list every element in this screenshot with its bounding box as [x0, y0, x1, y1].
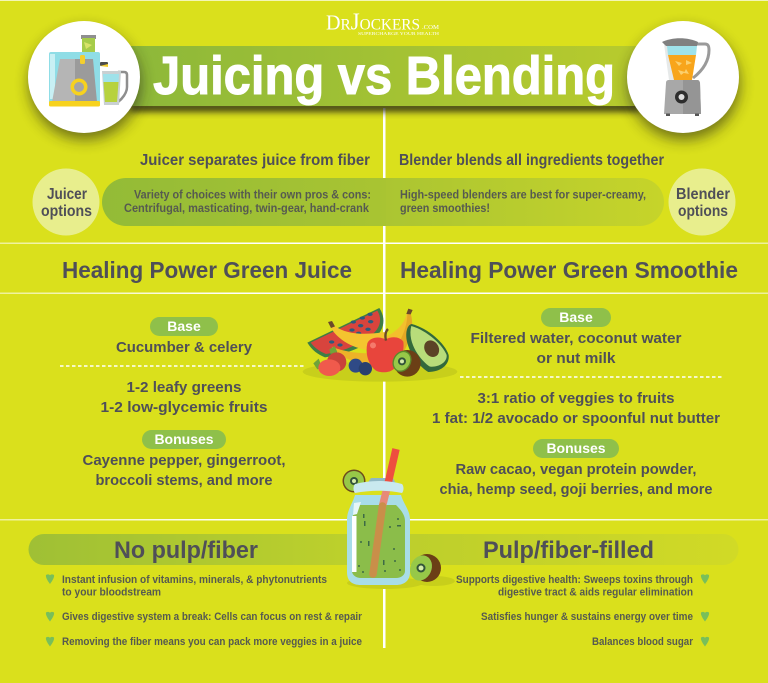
panel: juice recipe: 1-2 leafy greens [126, 379, 242, 396]
logo: DrJockers.com: .COM [422, 24, 439, 31]
panel: blender options: Blender [676, 186, 730, 203]
panel: pulp/fiber-filled header [386, 534, 738, 565]
icon: blender [627, 21, 740, 140]
list: no pulp/fiber benefits: Instant infusion of vitamins, minerals, & phytonutrients [62, 574, 327, 586]
list: pulp/fiber benefits: Supports digestive health: Sweeps toxins through [456, 574, 693, 586]
icon: juicer [28, 21, 141, 140]
panel: juice recipe: Cucumber & celery [116, 339, 253, 356]
panel: juicer options [32, 168, 386, 236]
list: no pulp/fiber benefits: to your bloodstream [62, 586, 161, 598]
panel: juice recipe: broccoli stems, and more [96, 472, 272, 489]
panel: smoothie recipe: 3:1 ratio of veggies to fruits [478, 390, 674, 407]
panel: pulp/fiber-filled header: Pulp/fiber-filled [483, 537, 654, 564]
icon: heart bullet [701, 612, 709, 622]
list: pulp/fiber benefits [456, 574, 709, 648]
panel: smoothie recipe: 1 fat: 1/2 avocado or spoonful nut butter [432, 410, 720, 427]
icon: heart bullet [46, 637, 54, 646]
panel: juicer options: Juicer [47, 186, 87, 203]
panel: juice recipe [60, 317, 306, 489]
text: blender summary: Blender blends all ingredients together [399, 152, 664, 169]
panel: juice recipe: 1-2 low-glycemic fruits [100, 399, 268, 416]
heading: green juice: Healing Power Green Juice [62, 257, 352, 283]
icon: smoothie jar with kiwis [342, 449, 455, 589]
list: pulp/fiber benefits: Balances blood sugar [592, 636, 694, 648]
panel: smoothie recipe: or nut milk [536, 350, 616, 367]
heading: green smoothie: Healing Power Green Smoothie [400, 257, 738, 283]
logo: DrJockers.com: DRJOCKERS [326, 10, 420, 36]
list: no pulp/fiber benefits: Gives digestive system a break: Cells can focus on rest & repair [62, 611, 363, 623]
icon: fruit pile [303, 308, 457, 382]
panel: no pulp/fiber header [28, 534, 386, 565]
panel: blender options: options [678, 203, 728, 220]
list: pulp/fiber benefits: Satisfies hunger & sustains energy over time [481, 611, 693, 623]
panel: juice recipe: Bonuses [154, 431, 214, 447]
icon: heart bullet [46, 612, 54, 622]
list: no pulp/fiber benefits [46, 574, 363, 648]
icon: heart bullet [701, 637, 709, 646]
list: pulp/fiber benefits: digestive tract & aids regular elimination [498, 586, 693, 598]
panel: smoothie recipe: Bonuses [546, 440, 606, 456]
panel: juice recipe: Base [167, 318, 201, 334]
panel: no pulp/fiber header: No pulp/fiber [114, 537, 258, 564]
title band [130, 46, 640, 112]
icon: heart bullet [46, 574, 54, 584]
panel: blender options: High-speed blenders are best for super-creamy, [400, 190, 646, 202]
panel: smoothie recipe: Base [559, 309, 593, 325]
title: Juicing vs Blending [153, 46, 615, 106]
panel: smoothie recipe: chia, hemp seed, goji berries, and more [440, 481, 712, 498]
panel: juicer options: options [41, 203, 92, 220]
panel: juicer options: Centrifugal, masticating, twin-gear, hand-crank [124, 203, 370, 215]
logo: DrJockers.com: SUPERCHARGE YOUR HEALTH [358, 31, 440, 36]
icon: heart bullet [701, 574, 709, 584]
text: juicer summary: Juicer separates juice from fiber [140, 152, 370, 169]
panel: juice recipe: Cayenne pepper, gingerroot, [82, 452, 286, 469]
panel: juicer options: Variety of choices with their own pros & cons: [134, 190, 371, 202]
list: no pulp/fiber benefits: Removing the fiber means you can pack more veggies in a juice [62, 636, 362, 648]
panel: blender options [386, 168, 736, 236]
panel: blender options: green smoothies! [400, 203, 490, 215]
panel: smoothie recipe [432, 308, 722, 498]
panel: smoothie recipe: Filtered water, coconut water [470, 330, 682, 347]
panel: smoothie recipe: Raw cacao, vegan protein powder, [456, 461, 696, 478]
